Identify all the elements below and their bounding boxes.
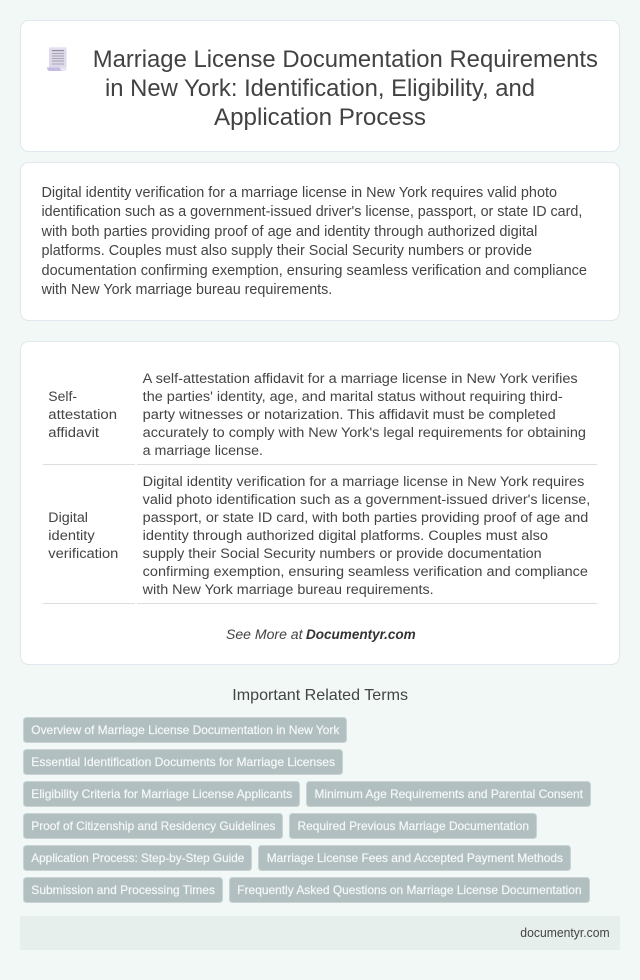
- see more link: Documentyr.com: [306, 627, 416, 643]
- title: in New York: Identification, Eligibility, and: [105, 75, 535, 102]
- term: self-attestation affidavit: [48, 389, 117, 441]
- tag: Proof of Citizenship and Residency Guidelines: [31, 819, 275, 833]
- footer brand: documentyr.com: [520, 925, 610, 940]
- related terms tags: [24, 718, 590, 902]
- term: digital identity verification: identity: [48, 528, 96, 544]
- tag: Frequently Asked Questions on Marriage License Documentation: [237, 883, 582, 897]
- tag: [24, 782, 300, 806]
- tag: [290, 814, 536, 838]
- definition: self-attestation affidavit: accurately to comply with New York's legal requirements for obtaining: [143, 425, 586, 441]
- definition: self-attestation affidavit: party witnesses or notarization. This affidavit must be completed: [143, 407, 556, 423]
- tag: Overview of Marriage License Documentation in New York: [31, 723, 340, 737]
- tag: Eligibility Criteria for Marriage License Applicants: [31, 787, 292, 801]
- footer bar: [20, 916, 620, 950]
- term: self-attestation affidavit: Self-: [48, 389, 77, 405]
- definition: self-attestation affidavit: a marriage license.: [143, 443, 263, 459]
- definition: digital identity verification: with New York marriage bureau requirements.: [142, 582, 434, 598]
- definition: self-attestation affidavit: A self-attestation affidavit for a marriage license in New York verifies: [143, 371, 578, 387]
- tag: [24, 814, 282, 838]
- tag: [306, 782, 590, 806]
- intro text block: Digital identity verification for a marriage license in New York requires valid photo: [42, 185, 557, 201]
- tag: [230, 878, 590, 902]
- tag: [24, 846, 252, 870]
- table row: self-attestation affidavit: [48, 371, 586, 459]
- see more link: See More at: [226, 627, 304, 643]
- definition: digital identity verification: valid photo identification such as a government-issued driver's license,: [143, 492, 590, 508]
- term: digital identity verification: verification: [48, 546, 118, 562]
- tag: Essential Identification Documents for Marriage Licenses: [31, 755, 335, 769]
- intro text block: [41, 185, 587, 298]
- intro text block: identification such as a government-issued driver's license, passport, or state ID card,: [42, 204, 582, 220]
- definition: digital identity verification: Digital identity verification for a marriage license in New York requires: [143, 474, 584, 490]
- icon: document scroll: [47, 47, 66, 71]
- intro text block: with New York marriage bureau requirements.: [41, 282, 332, 298]
- definition: digital identity verification: [142, 474, 590, 598]
- definition: digital identity verification: supply their Social Security numbers or provide documentation: [143, 546, 542, 562]
- see more link: [226, 627, 416, 643]
- title: [93, 46, 598, 131]
- definition: self-attestation affidavit: the parties' identity, age, and marital status without requiring third-: [143, 389, 563, 405]
- tag: [258, 846, 570, 870]
- tag: [24, 878, 222, 902]
- tag: Required Previous Marriage Documentation: [298, 819, 529, 833]
- panel: title card: [20, 20, 620, 152]
- intro text block: platforms. Couples must also supply their Social Security numbers or provide: [42, 243, 532, 259]
- definition: digital identity verification: confirming exemption, ensuring seamless verification and compliance: [143, 564, 588, 580]
- title: Marriage License Documentation Requirements: [93, 46, 598, 73]
- definition: self-attestation affidavit: [143, 371, 586, 459]
- tag: [24, 750, 342, 774]
- term: self-attestation affidavit: attestation: [48, 407, 117, 423]
- tag: Marriage License Fees and Accepted Payment Methods: [267, 851, 563, 865]
- intro text block: with both parties providing proof of age and identity through authorized digital: [41, 224, 537, 240]
- tag: Application Process: Step-by-Step Guide: [31, 851, 245, 865]
- term: digital identity verification: [48, 510, 118, 562]
- panel: introduction: [20, 162, 620, 320]
- panel: definitions table: [20, 342, 620, 664]
- tag: [24, 718, 346, 742]
- term: self-attestation affidavit: affidavit: [48, 425, 99, 441]
- definition: digital identity verification: passport, or state ID card, with both parties providing proof of age and: [143, 510, 588, 526]
- table row: digital identity verification: [48, 474, 590, 598]
- tag: Minimum Age Requirements and Parental Consent: [314, 787, 584, 801]
- definition: digital identity verification: identity through authorized digital platforms. Couples must also: [143, 528, 548, 544]
- title: Application Process: [214, 104, 426, 131]
- intro text block: documentation confirming exemption, ensuring seamless verification and compliance: [42, 263, 587, 279]
- heading: important related terms: Important Related Terms: [232, 687, 408, 704]
- term: digital identity verification: Digital: [48, 510, 88, 526]
- tag: Submission and Processing Times: [31, 883, 215, 897]
